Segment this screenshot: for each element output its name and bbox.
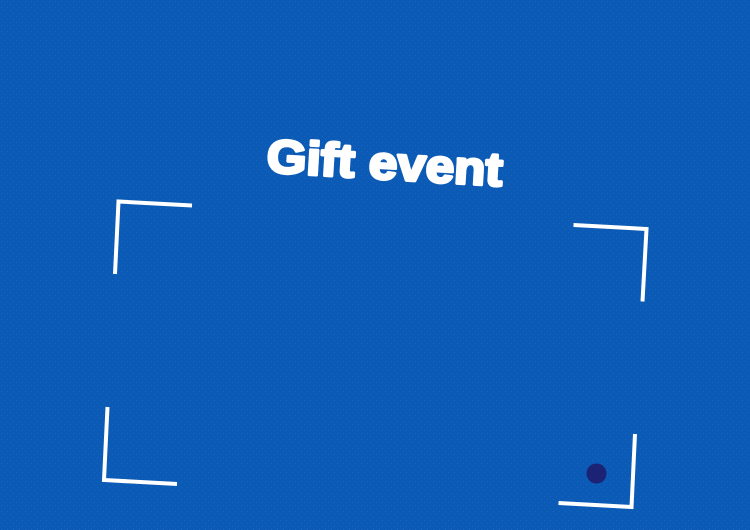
dark blue dot <box>586 464 606 484</box>
corner bracket: bottom right <box>558 434 635 507</box>
corner bracket: top right <box>574 225 646 302</box>
corner bracket: bottom left <box>104 407 177 484</box>
title: Gift event <box>265 129 505 196</box>
corner bracket: top left <box>115 202 192 274</box>
